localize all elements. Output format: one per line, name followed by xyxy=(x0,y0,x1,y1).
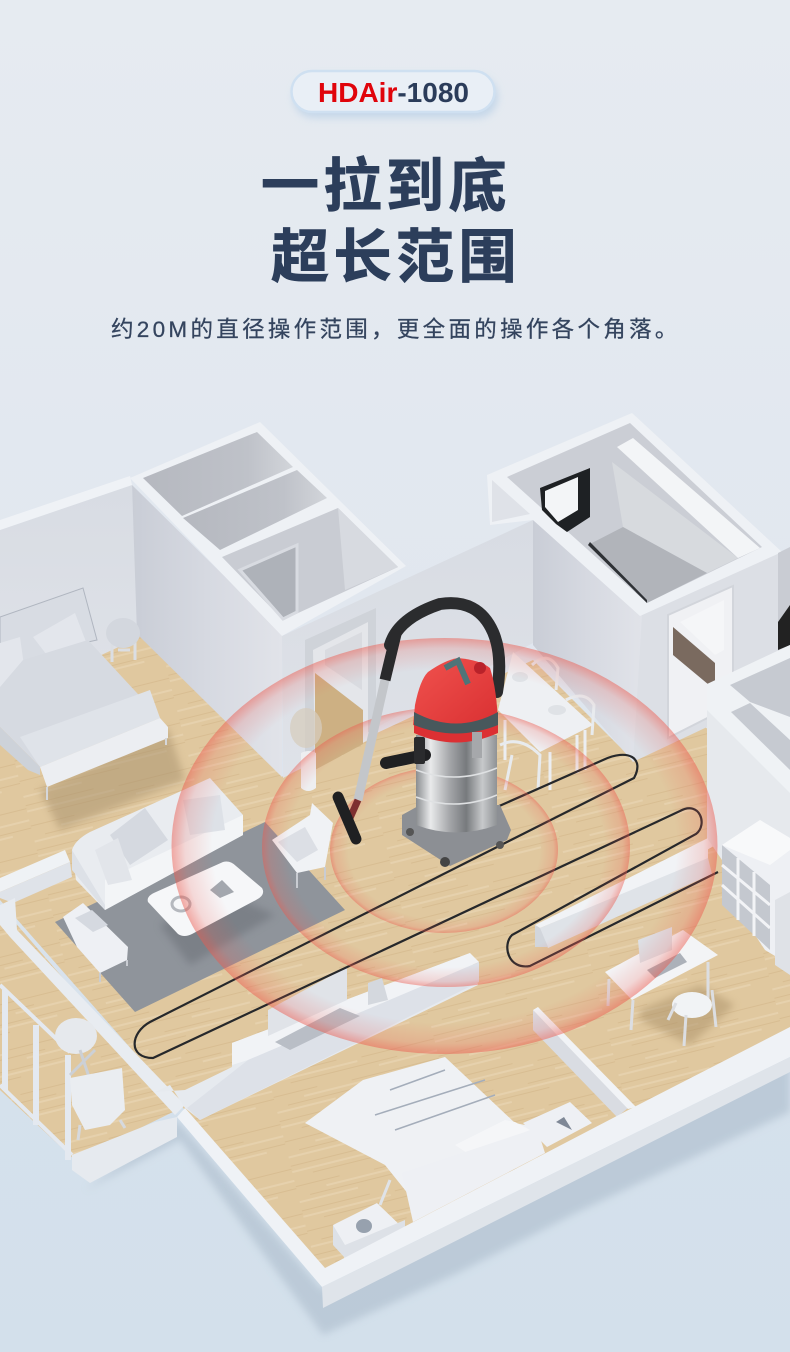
headboard xyxy=(402,1128,545,1222)
coffee table xyxy=(148,862,275,965)
right room block xyxy=(707,645,790,860)
living low wall xyxy=(0,850,72,903)
inner ring xyxy=(330,767,558,933)
balcony side wall xyxy=(0,898,185,1115)
blanket xyxy=(305,1057,540,1200)
steel tank xyxy=(416,735,497,832)
shelves xyxy=(722,820,790,975)
balcony railing xyxy=(0,985,72,1160)
right dark window xyxy=(778,605,790,650)
tv screen xyxy=(268,967,347,1036)
cushions xyxy=(110,808,168,865)
outer ring xyxy=(172,638,718,1054)
dining table xyxy=(498,652,594,790)
nightstand right xyxy=(523,1102,592,1147)
desk xyxy=(605,927,735,1046)
desk chair xyxy=(668,990,716,1046)
wood floors xyxy=(0,635,790,1275)
right door xyxy=(668,586,733,738)
outer wall xyxy=(177,1027,790,1308)
ground shadow xyxy=(85,1060,790,1335)
wand xyxy=(358,680,385,800)
monitor xyxy=(638,927,672,963)
floor brush xyxy=(338,797,356,839)
bottom bed xyxy=(305,1057,592,1260)
bed xyxy=(588,527,707,603)
nightstand left xyxy=(333,1203,405,1260)
side inlet xyxy=(386,755,425,763)
round stool xyxy=(106,618,140,662)
armchair left xyxy=(63,903,128,982)
armchair right xyxy=(272,803,333,888)
hose xyxy=(390,603,499,692)
tv wall and cabinet xyxy=(155,953,479,1120)
title: 超长范围 xyxy=(271,225,521,290)
middle ring xyxy=(262,707,630,987)
headboard xyxy=(0,588,98,643)
floor plan scene xyxy=(0,413,790,1335)
subtitle: 约20M的直径操作范围，更全面的操作各个角落。 xyxy=(111,317,681,342)
power cord xyxy=(135,755,718,1058)
clip xyxy=(472,732,482,758)
rug xyxy=(55,822,345,1012)
range rings xyxy=(172,638,718,1054)
vase with plant xyxy=(290,708,322,791)
red lid xyxy=(413,658,498,732)
balcony table and chair xyxy=(55,1018,125,1140)
top right room xyxy=(487,413,782,616)
central wall front xyxy=(282,520,533,778)
drawers xyxy=(673,627,715,690)
sofa xyxy=(72,778,243,910)
chairs xyxy=(500,658,594,790)
handle xyxy=(445,661,468,684)
closet room 3 xyxy=(222,508,398,620)
right low wall xyxy=(535,838,712,948)
dining wall right face xyxy=(533,520,642,762)
model badge: HDAir-1080 xyxy=(318,77,469,108)
closet door xyxy=(240,545,297,619)
wall front with door xyxy=(633,553,778,762)
pillows xyxy=(34,614,86,653)
bed left xyxy=(0,588,185,830)
collar xyxy=(414,712,498,738)
wall top ledge xyxy=(0,476,132,530)
closet block top xyxy=(130,422,406,636)
balcony front wall xyxy=(72,1117,177,1183)
mattress xyxy=(0,640,160,767)
room divider xyxy=(533,1007,636,1117)
window xyxy=(540,468,590,532)
closet room 2 xyxy=(183,470,327,550)
base xyxy=(402,805,511,866)
door with bathroom view xyxy=(305,608,376,770)
closet room 1 xyxy=(143,432,293,516)
bedroom side wall xyxy=(132,485,282,777)
pillow xyxy=(455,1120,530,1155)
title xyxy=(261,154,521,290)
title: 一拉到底 xyxy=(261,154,511,219)
model badge xyxy=(292,71,498,118)
far right wall xyxy=(778,547,790,657)
bedroom back wall xyxy=(0,485,136,655)
underbed shadow xyxy=(417,1160,550,1228)
vacuum cleaner xyxy=(338,603,511,867)
balcony floor xyxy=(0,924,172,1157)
